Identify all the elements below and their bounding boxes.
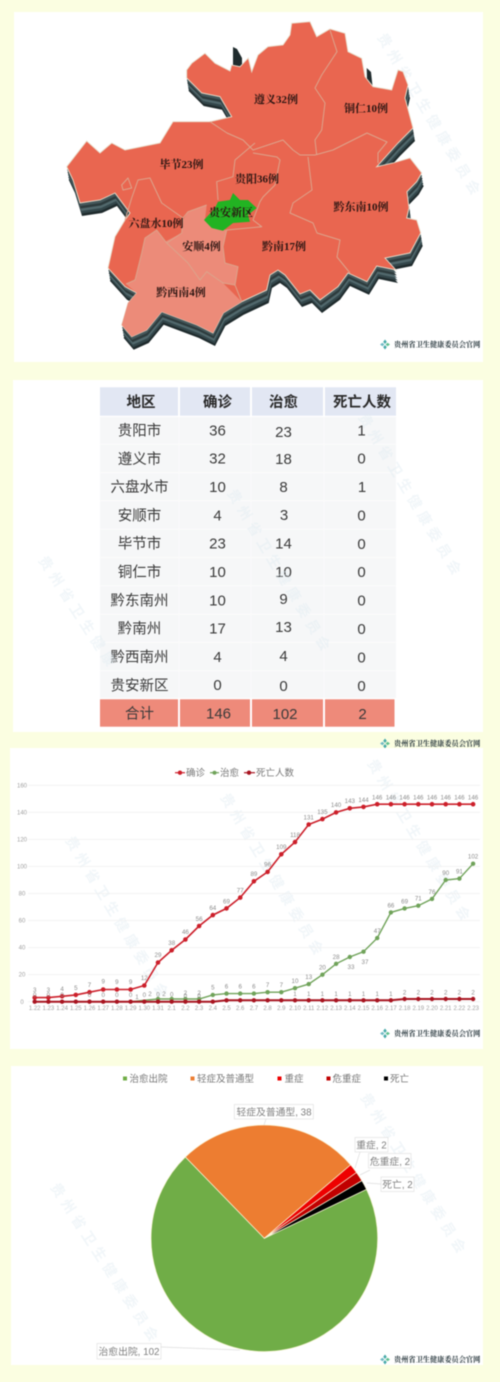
- data labels: 确诊: 131: [304, 814, 314, 822]
- x axis date labels: 2.7: [250, 1006, 259, 1012]
- table body: 10: [275, 564, 292, 581]
- table total row: [100, 699, 394, 727]
- y axis labels: 60: [19, 918, 26, 924]
- map labels: 铜仁10例: [344, 101, 388, 115]
- data labels: 治愈: 66: [387, 902, 395, 910]
- data labels: 死亡人数: 0: [170, 992, 174, 998]
- data labels: 死亡人数: 1: [334, 991, 338, 998]
- x axis date labels: 1.29: [125, 1006, 137, 1012]
- logo: map panel: [380, 340, 480, 350]
- grid lines: [28, 785, 480, 1002]
- chart legend: 治愈: [220, 767, 240, 779]
- region: 安顺: [165, 205, 238, 285]
- table body: 贵安新区: [110, 677, 168, 694]
- pie legend: 危重症: [332, 1073, 362, 1085]
- x axis date labels: 2.8: [263, 1006, 272, 1012]
- data labels: 治愈: 0: [33, 992, 37, 999]
- table body: 23: [209, 536, 226, 553]
- data labels: 治愈: 71: [415, 896, 422, 902]
- data labels: 确诊: 4: [60, 986, 64, 993]
- data labels: 确诊: 12: [141, 975, 148, 982]
- data labels: 治愈: 47: [374, 928, 381, 935]
- table body: 9: [279, 591, 288, 608]
- x axis date labels: 2.6: [236, 1006, 245, 1012]
- y axis labels: 80: [19, 892, 26, 898]
- data labels: 死亡人数: 2: [444, 990, 448, 996]
- y axis labels: 160: [17, 784, 28, 790]
- data labels: 确诊: 143: [345, 798, 356, 805]
- pie legend: 轻症及普通型: [197, 1073, 255, 1085]
- data labels: 死亡人数: 2: [430, 990, 434, 996]
- data labels: 治愈: 0: [115, 992, 119, 999]
- data labels: 确诊: 146: [413, 794, 424, 802]
- data labels: 死亡人数: 0: [143, 992, 147, 999]
- data labels: 确诊: 118: [290, 832, 300, 839]
- data labels: 治愈: 90: [442, 870, 450, 877]
- data labels: 治愈: 7: [280, 982, 284, 989]
- map labels: 安顺4例: [182, 239, 221, 253]
- leader lines: [161, 1119, 381, 1350]
- logo: map panel: 贵州省卫生健康委员会官网: [394, 340, 480, 349]
- table body: 黔西南州: [110, 649, 168, 666]
- table body: 铜仁市: [118, 564, 161, 581]
- data labels: 确诊: 46: [182, 929, 189, 936]
- y axis labels: 20: [19, 972, 26, 978]
- table body: 0: [357, 536, 366, 553]
- table body: 23: [275, 424, 292, 441]
- data labels: 确诊: 3: [33, 987, 37, 994]
- watermark: pie panel: 贵州省卫生健康委员会: [357, 1090, 472, 1260]
- data labels: 确诊: 29: [155, 952, 162, 959]
- data labels: 治愈: 33: [348, 964, 355, 971]
- data labels: 确诊: 38: [168, 940, 176, 947]
- x axis date labels: 2.20: [426, 1006, 438, 1012]
- slice: 死亡: [264, 1181, 366, 1238]
- data labels: 确诊: 109: [276, 844, 287, 851]
- data labels: 治愈: 20: [319, 964, 326, 972]
- pie data labels: 死亡, 2: [382, 1178, 413, 1191]
- data labels: 治愈: 1: [135, 994, 139, 1001]
- data labels: 死亡人数: 1: [362, 991, 366, 998]
- logo: line chart panel: 贵州省卫生健康委员会官网: [394, 1029, 480, 1038]
- pie data labels: 轻症及普通型, 38: [236, 1106, 312, 1118]
- logo: table panel: [380, 738, 480, 748]
- watermark: pie panel: [47, 1090, 472, 1348]
- x axis date labels: 1.25: [70, 1006, 82, 1012]
- table total row: 2: [358, 706, 367, 723]
- map labels: 黔东南10例: [334, 200, 388, 214]
- data labels: 治愈: 6: [238, 984, 242, 990]
- pie data labels: 重症, 2: [356, 1138, 387, 1152]
- x axis date labels: 2.15: [358, 1006, 370, 1012]
- table body: 0: [357, 508, 366, 524]
- data labels: 死亡人数: 1: [293, 991, 297, 998]
- x axis date labels: 2.4: [209, 1006, 218, 1012]
- watermark: line chart panel: 贵州省卫生健康委员会: [62, 833, 174, 1004]
- data labels: 治愈: [33, 854, 479, 1001]
- data labels: 治愈: 69: [401, 898, 409, 906]
- data labels: 死亡人数: 2: [458, 990, 462, 996]
- table body: 10: [209, 479, 226, 496]
- pie chart: [151, 1125, 378, 1352]
- data labels: 确诊: 9: [115, 979, 119, 986]
- data labels: 死亡人数: 1: [389, 991, 393, 998]
- data labels: 确诊: 146: [399, 794, 410, 802]
- pie data labels: 治愈出院, 102: [99, 1345, 159, 1358]
- x axis date labels: 2.5: [222, 1006, 231, 1012]
- table body: 3: [280, 507, 288, 524]
- data labels: 治愈: 6: [225, 984, 229, 990]
- y axis labels: 40: [19, 946, 26, 952]
- x axis date labels: 2.23: [467, 1006, 480, 1012]
- x axis date labels: 2.21: [440, 1006, 452, 1012]
- table body: 13: [275, 619, 292, 636]
- data labels: 治愈: 7: [266, 982, 270, 989]
- data labels: 确诊: 64: [209, 905, 217, 912]
- data labels: 治愈: 0: [101, 992, 105, 999]
- table body: 0: [357, 678, 366, 695]
- data labels: 死亡人数: 1: [375, 991, 379, 998]
- pie data labels: [97, 1104, 414, 1359]
- table body: 安顺市: [118, 507, 161, 524]
- map labels: 六盘水10例: [128, 216, 184, 230]
- table total row: 146: [206, 706, 231, 722]
- data labels: 确诊: 7: [88, 982, 92, 989]
- table body: 10: [209, 564, 226, 581]
- pie legend: 重症: [284, 1073, 304, 1085]
- data labels: 死亡人数: 1: [321, 991, 325, 998]
- y axis labels: 100: [17, 864, 28, 870]
- data labels: 死亡人数: 0: [156, 992, 160, 998]
- data labels: 治愈: 2: [184, 990, 188, 997]
- logo: pie panel: 贵州省卫生健康委员会官网: [394, 1355, 480, 1364]
- watermark: pie panel: 贵州省卫生健康委员会: [47, 1180, 164, 1348]
- x axis date labels: 2.9: [277, 1006, 286, 1012]
- slice: 治愈出院: [151, 1157, 378, 1352]
- watermark: table panel: 贵州省卫生健康委员会: [355, 410, 467, 581]
- table total row: 102: [272, 706, 298, 723]
- data labels: 治愈: 91: [456, 868, 463, 876]
- data labels: 治愈: 13: [305, 974, 313, 981]
- table body: 4: [213, 507, 222, 524]
- x axis date labels: 1.26: [84, 1006, 96, 1012]
- watermark: table panel: 贵州省卫生健康: [35, 553, 121, 673]
- pie legend: 死亡: [390, 1073, 409, 1085]
- data labels: 治愈: 0: [129, 992, 133, 999]
- data labels: 确诊: 96: [264, 862, 272, 868]
- watermark: table panel: 贵州省卫生健康委员会: [224, 486, 336, 657]
- table body: 4: [213, 649, 222, 666]
- data labels: 治愈: 0: [60, 992, 64, 999]
- logo: line chart panel: [380, 1028, 480, 1038]
- table body: 0: [357, 649, 366, 666]
- x axis date labels: 2.10: [289, 1006, 301, 1012]
- y axis labels: 140: [17, 810, 28, 816]
- table body: 0: [213, 677, 222, 694]
- watermark: table panel: [35, 410, 467, 673]
- table body: 10: [209, 592, 226, 609]
- table body: 36: [209, 422, 226, 440]
- x axis date labels: 2.19: [412, 1006, 425, 1012]
- y axis labels: 0: [20, 1000, 24, 1006]
- table header: 确诊: [203, 393, 232, 411]
- data labels: 确诊: 77: [237, 888, 244, 894]
- x axis date labels: 2.1: [168, 1006, 177, 1012]
- y axis labels: [17, 784, 28, 1006]
- table body: 17: [209, 621, 226, 638]
- series: 治愈: [35, 862, 475, 1002]
- table body: 0: [357, 450, 366, 468]
- watermark: line chart panel: 贵州省卫生健康委员会: [217, 790, 329, 961]
- x axis date labels: [29, 1006, 480, 1012]
- table body: 32: [209, 450, 226, 468]
- data labels: 确诊: 146: [441, 794, 451, 802]
- x axis date labels: 1.22: [29, 1006, 41, 1012]
- panel: pie chart: [11, 1066, 483, 1365]
- map labels: 遵义32例: [254, 92, 298, 106]
- data labels: 死亡人数: 1: [307, 991, 311, 998]
- table body: 毕节市: [118, 536, 161, 553]
- map labels: [128, 92, 388, 299]
- x axis date labels: 2.11: [303, 1006, 315, 1012]
- watermark: line chart panel: [62, 756, 476, 1004]
- table body: 4: [279, 648, 288, 665]
- data labels: 确诊: 3: [47, 987, 51, 994]
- data labels: 治愈: 5: [211, 984, 215, 992]
- x axis date labels: 1.27: [97, 1006, 110, 1012]
- data labels: 确诊: 89: [250, 871, 258, 878]
- x axis date labels: 2.3: [195, 1006, 204, 1012]
- chart legend: 死亡人数: [256, 767, 295, 779]
- table total row: 合计: [125, 706, 154, 722]
- data labels: 确诊: 146: [372, 794, 383, 802]
- slice: 轻症及普通型: [185, 1125, 351, 1238]
- data labels: 确诊: 146: [386, 794, 397, 802]
- map labels: 贵安新区: [209, 205, 253, 219]
- x axis date labels: 2.2: [181, 1006, 190, 1012]
- chart legend: [175, 767, 295, 779]
- data labels: 确诊: 56: [196, 916, 203, 923]
- data labels: 确诊: 69: [223, 898, 230, 906]
- x axis date labels: 2.17: [385, 1006, 397, 1012]
- data labels: 治愈: 0: [88, 992, 92, 999]
- data labels: 死亡人数: 2: [417, 990, 421, 996]
- table header: 地区: [126, 394, 156, 411]
- table body: 0: [279, 678, 288, 695]
- pie legend: [123, 1073, 409, 1085]
- data labels: 确诊: 144: [358, 797, 369, 804]
- table body: 六盘水市: [110, 478, 168, 496]
- logo: table panel: 贵州省卫生健康委员会官网: [394, 739, 480, 748]
- data labels: 确诊: 146: [468, 794, 479, 802]
- map labels: 黔南17例: [262, 239, 306, 253]
- table body: 遵义市: [118, 451, 161, 468]
- table body: [100, 417, 396, 698]
- data labels: 确诊: [33, 794, 479, 994]
- x axis date labels: 2.12: [317, 1006, 329, 1012]
- table body: 1: [357, 422, 366, 440]
- data labels: 治愈: 76: [429, 889, 436, 896]
- x axis date labels: 2.22: [454, 1006, 466, 1012]
- slice: 重症: [264, 1165, 356, 1238]
- region: 黔西南: [122, 230, 242, 337]
- chart legend: 确诊: [186, 767, 206, 779]
- data labels: 治愈: 0: [47, 992, 51, 999]
- pie data labels: 危重症, 2: [370, 1155, 410, 1168]
- table body: 0: [357, 592, 366, 610]
- x axis date labels: 2.13: [330, 1006, 343, 1012]
- data labels: 治愈: 2: [162, 991, 166, 998]
- data labels: 死亡人数: 2: [471, 990, 475, 996]
- panel: table: [13, 380, 483, 732]
- table body: 黔南州: [118, 621, 161, 638]
- data labels: 确诊: 146: [427, 794, 438, 802]
- data labels: 确诊: 5: [74, 985, 78, 992]
- series: 确诊: [32, 802, 475, 1000]
- panel: line chart: [10, 748, 483, 1049]
- x axis date labels: 2.14: [344, 1006, 356, 1012]
- table body: 14: [275, 536, 292, 553]
- x axis date labels: 1.31: [152, 1006, 164, 1012]
- pie legend: 治愈出院: [130, 1073, 168, 1085]
- data labels: 确诊: 9: [101, 978, 105, 986]
- table header: 死亡人数: [333, 393, 391, 411]
- data labels: 死亡人数: 1: [348, 991, 352, 998]
- data labels: 死亡人数: 0: [184, 993, 188, 1000]
- map labels: 贵阳36例: [235, 172, 279, 186]
- data labels: 确诊: 140: [331, 802, 342, 809]
- x axis date labels: 1.28: [111, 1006, 123, 1012]
- data labels: 死亡人数: 2: [403, 990, 407, 996]
- data labels: 死亡人数: [143, 990, 475, 1000]
- table body: 贵阳市: [118, 422, 161, 440]
- data labels: 确诊: 9: [129, 979, 133, 986]
- data labels: 治愈: 28: [333, 954, 340, 961]
- table header: [100, 387, 396, 416]
- table header: 治愈: [269, 393, 298, 411]
- slice: 危重症: [264, 1172, 362, 1238]
- data labels: 治愈: 2: [148, 991, 152, 998]
- y axis labels: 120: [17, 838, 28, 844]
- panel: map: [14, 12, 486, 362]
- x axis date labels: 2.18: [399, 1006, 411, 1012]
- x axis date labels: 1.30: [138, 1006, 151, 1012]
- x axis date labels: 1.24: [56, 1006, 69, 1012]
- data labels: 确诊: 135: [317, 809, 328, 816]
- map labels: 黔西南4例: [156, 285, 206, 299]
- region borders: [122, 30, 387, 302]
- table body: 黔东南州: [110, 592, 168, 609]
- logo: pie panel: [380, 1354, 480, 1364]
- watermark: map panel: 贵州省卫生健康委员会: [374, 30, 486, 201]
- region: 贵安新区: [204, 193, 257, 231]
- table body: 0: [357, 564, 366, 581]
- map of Guizhou: [67, 22, 424, 350]
- table body: 8: [279, 479, 288, 496]
- data labels: 治愈: 2: [197, 990, 201, 997]
- data labels: 死亡人数: 0: [197, 993, 201, 1000]
- series: 死亡人数: [32, 997, 475, 1004]
- data labels: 治愈: 37: [362, 959, 369, 966]
- map labels: 毕节23例: [160, 157, 204, 171]
- data labels: 确诊: 146: [454, 794, 465, 802]
- table body: 18: [275, 451, 292, 468]
- data labels: 治愈: 10: [292, 978, 299, 985]
- data labels: 治愈: 102: [468, 854, 479, 860]
- table body: 0: [357, 621, 366, 638]
- data labels: 治愈: 6: [252, 984, 256, 990]
- x axis date labels: 1.23: [43, 1006, 55, 1012]
- watermark: line chart panel: 贵州省卫生健康委员会: [364, 756, 476, 927]
- table body: 1: [358, 479, 366, 496]
- x axis date labels: 2.16: [371, 1006, 384, 1012]
